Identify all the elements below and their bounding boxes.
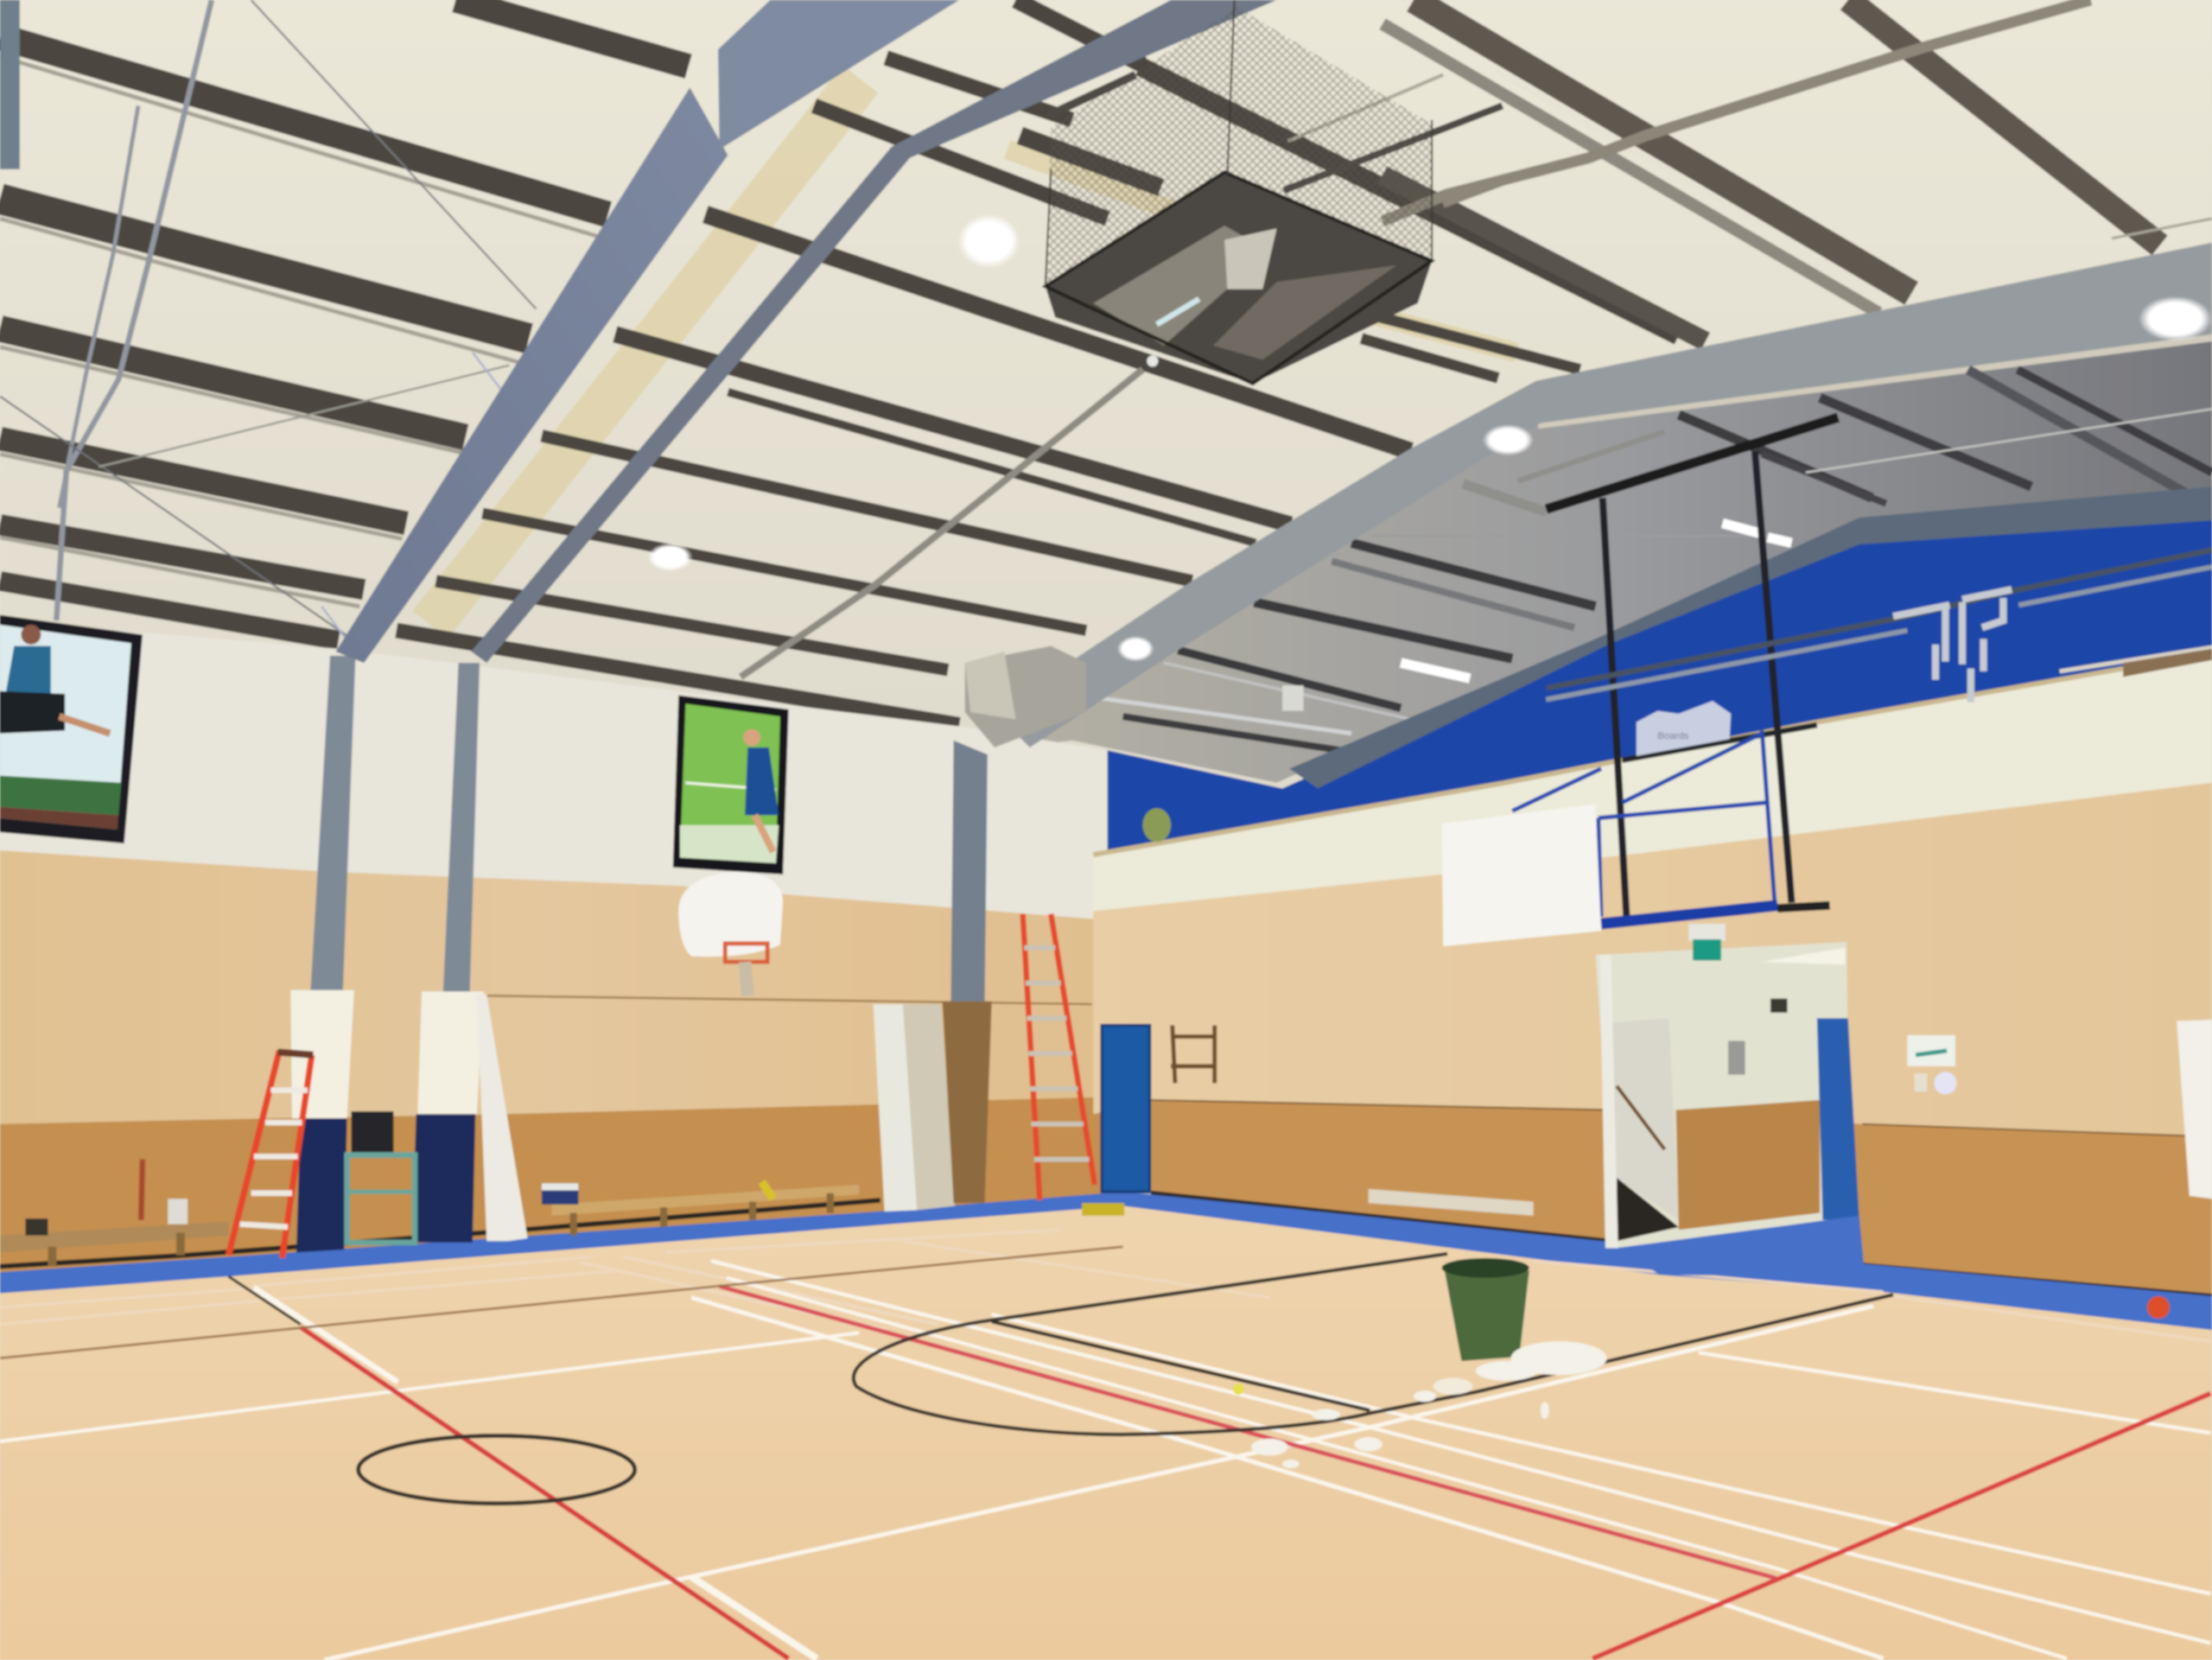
left basketball hoop [678, 872, 783, 995]
yellow tool on floor [1082, 1203, 1124, 1216]
ceiling purlins left bay [0, 0, 689, 640]
exit sign [1688, 924, 1726, 960]
doorway alcove [1596, 942, 1865, 1276]
ceiling panels [0, 0, 2212, 875]
teal equipment cart [347, 1111, 415, 1243]
wall padding pillar one [290, 990, 354, 1252]
main roof beam three right [995, 243, 2212, 747]
stacked boards and mat [874, 1002, 992, 1212]
wall notice and switches [1907, 1035, 1956, 1095]
right red ladder [1023, 914, 1095, 1200]
blue wall sign [1637, 701, 1731, 756]
second column [443, 663, 480, 995]
blue floor border [0, 1192, 2212, 1330]
left wall wood panels [0, 850, 1100, 1124]
left wall cream upper [0, 620, 1108, 931]
bench items [25, 1160, 578, 1236]
main roof beam one [336, 87, 728, 663]
vent strip on wall [1369, 1189, 1534, 1216]
goal support frame [1512, 417, 1838, 924]
wall pipes [1546, 550, 2212, 703]
blue wall sign: Boards [1657, 731, 1689, 741]
left corner blue door [1102, 1026, 1150, 1192]
badminton poster [673, 696, 789, 875]
wall-mounted bars [1171, 1026, 1216, 1083]
court lines [0, 1230, 2210, 1660]
far ceiling behind the right beam [1016, 317, 2212, 783]
HVAC heater unit [965, 646, 1086, 747]
roof beam four [1289, 487, 2212, 788]
wall padding pillar two [412, 991, 484, 1243]
far-left column [310, 656, 355, 995]
main roof beam two [471, 0, 1277, 663]
right wall wood panels [1093, 783, 2212, 1136]
ceiling purlins right bay [1382, 0, 2160, 341]
thin girts and wires on left ceiling [0, 0, 536, 663]
scattered shuttlecocks [1233, 1341, 1607, 1468]
left red ladder [228, 1051, 313, 1258]
hanging net cage [1046, 0, 1432, 384]
floor [0, 1205, 2212, 1660]
ceiling purlins middle bay [397, 0, 1679, 725]
right wall lower dark wood [1151, 1100, 2212, 1301]
mascot [1142, 808, 1171, 842]
green bucket [1442, 1258, 1529, 1361]
right wall upper cream [1093, 653, 2212, 911]
right backboard [1442, 804, 1601, 946]
right wooden bench [551, 1182, 859, 1236]
runner poster [0, 615, 143, 843]
right edge white board [2177, 1020, 2212, 1199]
ceiling cross girts [741, 0, 2212, 677]
left wall lower dark wood [0, 1097, 1128, 1275]
corner column [950, 741, 988, 1004]
blue upper wall [1108, 519, 2212, 855]
yellowed stains on ceiling [430, 79, 1516, 625]
ceiling lights [647, 214, 2212, 711]
white trim boards leaning [477, 995, 528, 1241]
red ball [2147, 1296, 2170, 1319]
beam haunch top [718, 0, 959, 149]
left wooden bench [0, 1221, 228, 1267]
